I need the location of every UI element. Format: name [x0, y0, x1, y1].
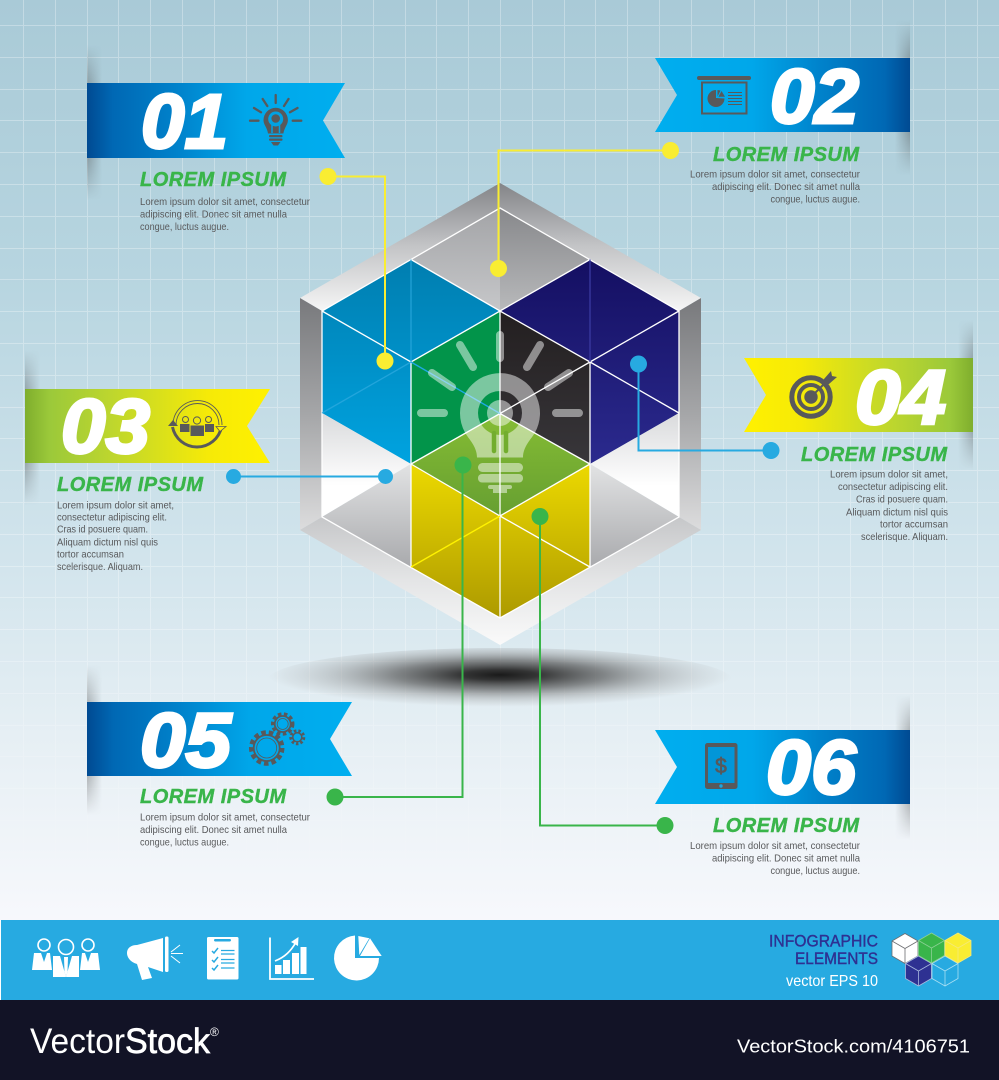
connector 06: green — [532, 508, 674, 834]
outer frame — [300, 183, 701, 645]
heading 05: LOREM IPSUM — [140, 786, 287, 808]
body text 06 — [690, 841, 860, 877]
footer blue bar — [1, 920, 999, 1000]
ribbon 04 — [744, 358, 973, 432]
ribbon 06 — [655, 730, 910, 804]
ribbon 01 — [87, 83, 345, 158]
body text 04: Lorem ipsum dolor sit amet, — [830, 470, 948, 481]
icon: team cycle — [168, 401, 226, 447]
number 01: 01 — [141, 79, 228, 165]
body text 03: scelerisque. Aliquam. — [57, 562, 143, 573]
body text 02: congue, luctus augue. — [770, 195, 860, 206]
body text 03: Lorem ipsum dolor sit amet, — [57, 500, 174, 511]
body text 02 — [690, 170, 860, 206]
heading 04: LOREM IPSUM — [801, 444, 948, 466]
body text 01: Lorem ipsum dolor sit amet, consectetur — [140, 197, 310, 208]
heading 03: LOREM IPSUM — [57, 474, 204, 496]
body text 04: scelerisque. Aliquam. — [861, 532, 948, 543]
icon: tablet with dollar: $ — [715, 755, 727, 778]
ground shadow under cube — [268, 648, 732, 712]
body text 05: Lorem ipsum dolor sit amet, consectetur — [140, 813, 310, 824]
icon: checklist clipboard — [207, 937, 238, 980]
body text 06: congue, luctus augue. — [770, 866, 860, 877]
heading 02: LOREM IPSUM — [713, 144, 860, 166]
black face — [500, 311, 590, 464]
icon: gears — [251, 714, 304, 764]
panel 05 — [87, 698, 352, 849]
body text 03: tortor accumsan — [57, 550, 124, 561]
title: infographic elements: ELEMENTS — [795, 950, 878, 968]
body text 06: Lorem ipsum dolor sit amet, consectetur — [690, 841, 860, 852]
light bulb overlay — [421, 335, 579, 493]
central hexagonal cube — [300, 183, 701, 645]
logo: VectorStock: Stock — [125, 1022, 210, 1061]
icon: mini cube cluster — [892, 933, 971, 986]
body text 04: Cras id posuere quam. — [856, 495, 948, 506]
panel 03 — [25, 384, 270, 573]
connector 05: green — [326, 456, 472, 806]
panel 01 — [87, 79, 345, 233]
ribbon edge shadows — [25, 20, 973, 840]
connector 01: yellow — [320, 168, 394, 370]
icon: business team — [32, 939, 100, 977]
body text 01: congue, luctus augue. — [140, 222, 229, 233]
icon: tablet with dollar — [705, 743, 738, 789]
body text 05: congue, luctus augue. — [140, 838, 229, 849]
body text 04 — [830, 470, 948, 543]
ribbon 02 — [655, 58, 910, 132]
watermark band — [0, 1000, 999, 1080]
title: infographic elements: vector EPS 10 — [786, 973, 878, 990]
icon: presentation board — [697, 76, 751, 114]
icon: target with arrow — [792, 371, 837, 416]
grey top face — [411, 208, 590, 311]
body text 02: Lorem ipsum dolor sit amet, consectetur — [690, 170, 860, 181]
logo: VectorStock: ® — [210, 1025, 219, 1039]
number 04: 04 — [855, 355, 946, 441]
green face — [411, 311, 500, 464]
panel 02 — [655, 54, 910, 206]
ribbon 05 — [87, 702, 352, 776]
left clear face — [322, 413, 411, 567]
body text 04: consectetur adipiscing elit. — [838, 482, 948, 493]
icon: pie chart — [334, 936, 382, 980]
number 06: 06 — [766, 725, 857, 811]
heading 01: LOREM IPSUM — [140, 169, 287, 191]
icon: light bulb — [250, 95, 301, 146]
title: infographic elements — [769, 933, 878, 990]
yellow cube face — [411, 464, 590, 618]
lime face — [411, 414, 590, 516]
navy cube face — [500, 260, 679, 464]
heading 06: LOREM IPSUM — [713, 815, 860, 837]
body text 03 — [57, 500, 174, 573]
connector 02: yellow — [490, 142, 679, 277]
logo: VectorStock: Vector — [30, 1022, 125, 1061]
body text 03: Aliquam dictum nisl quis — [57, 538, 158, 549]
connector 03: blue — [226, 469, 393, 484]
body text 04: tortor accumsan — [880, 520, 948, 531]
connector 04: blue — [630, 356, 780, 459]
body text 03: consectetur adipiscing elit. — [57, 513, 167, 524]
face edges — [322, 208, 679, 618]
blue cube face — [322, 260, 500, 464]
right clear face — [590, 413, 679, 567]
icon: megaphone — [127, 936, 183, 980]
body text 03: Cras id posuere quam. — [57, 525, 148, 536]
body text 05: adipiscing elit. Donec sit amet nulla — [140, 825, 287, 836]
icon: growth chart — [270, 937, 314, 979]
number 05: 05 — [140, 698, 232, 784]
panel 06 — [655, 725, 910, 877]
number 03: 03 — [61, 384, 150, 470]
body text 04: Aliquam dictum nisl quis — [846, 508, 948, 519]
panel 04 — [744, 355, 973, 543]
body text 01: adipiscing elit. Donec sit amet nulla — [140, 210, 287, 220]
number 02: 02 — [770, 54, 859, 140]
ribbon 03 — [25, 389, 270, 463]
body text 01 — [140, 197, 310, 233]
body text 05 — [140, 813, 310, 849]
body text 06: adipiscing elit. Donec sit amet nulla — [712, 854, 860, 865]
logo: VectorStock — [30, 1022, 219, 1061]
body text 02: adipiscing elit. Donec sit amet nulla — [712, 182, 860, 193]
image id: VectorStock.com/4106751 — [737, 1036, 970, 1057]
title: infographic elements: INFOGRAPHIC — [769, 933, 878, 951]
